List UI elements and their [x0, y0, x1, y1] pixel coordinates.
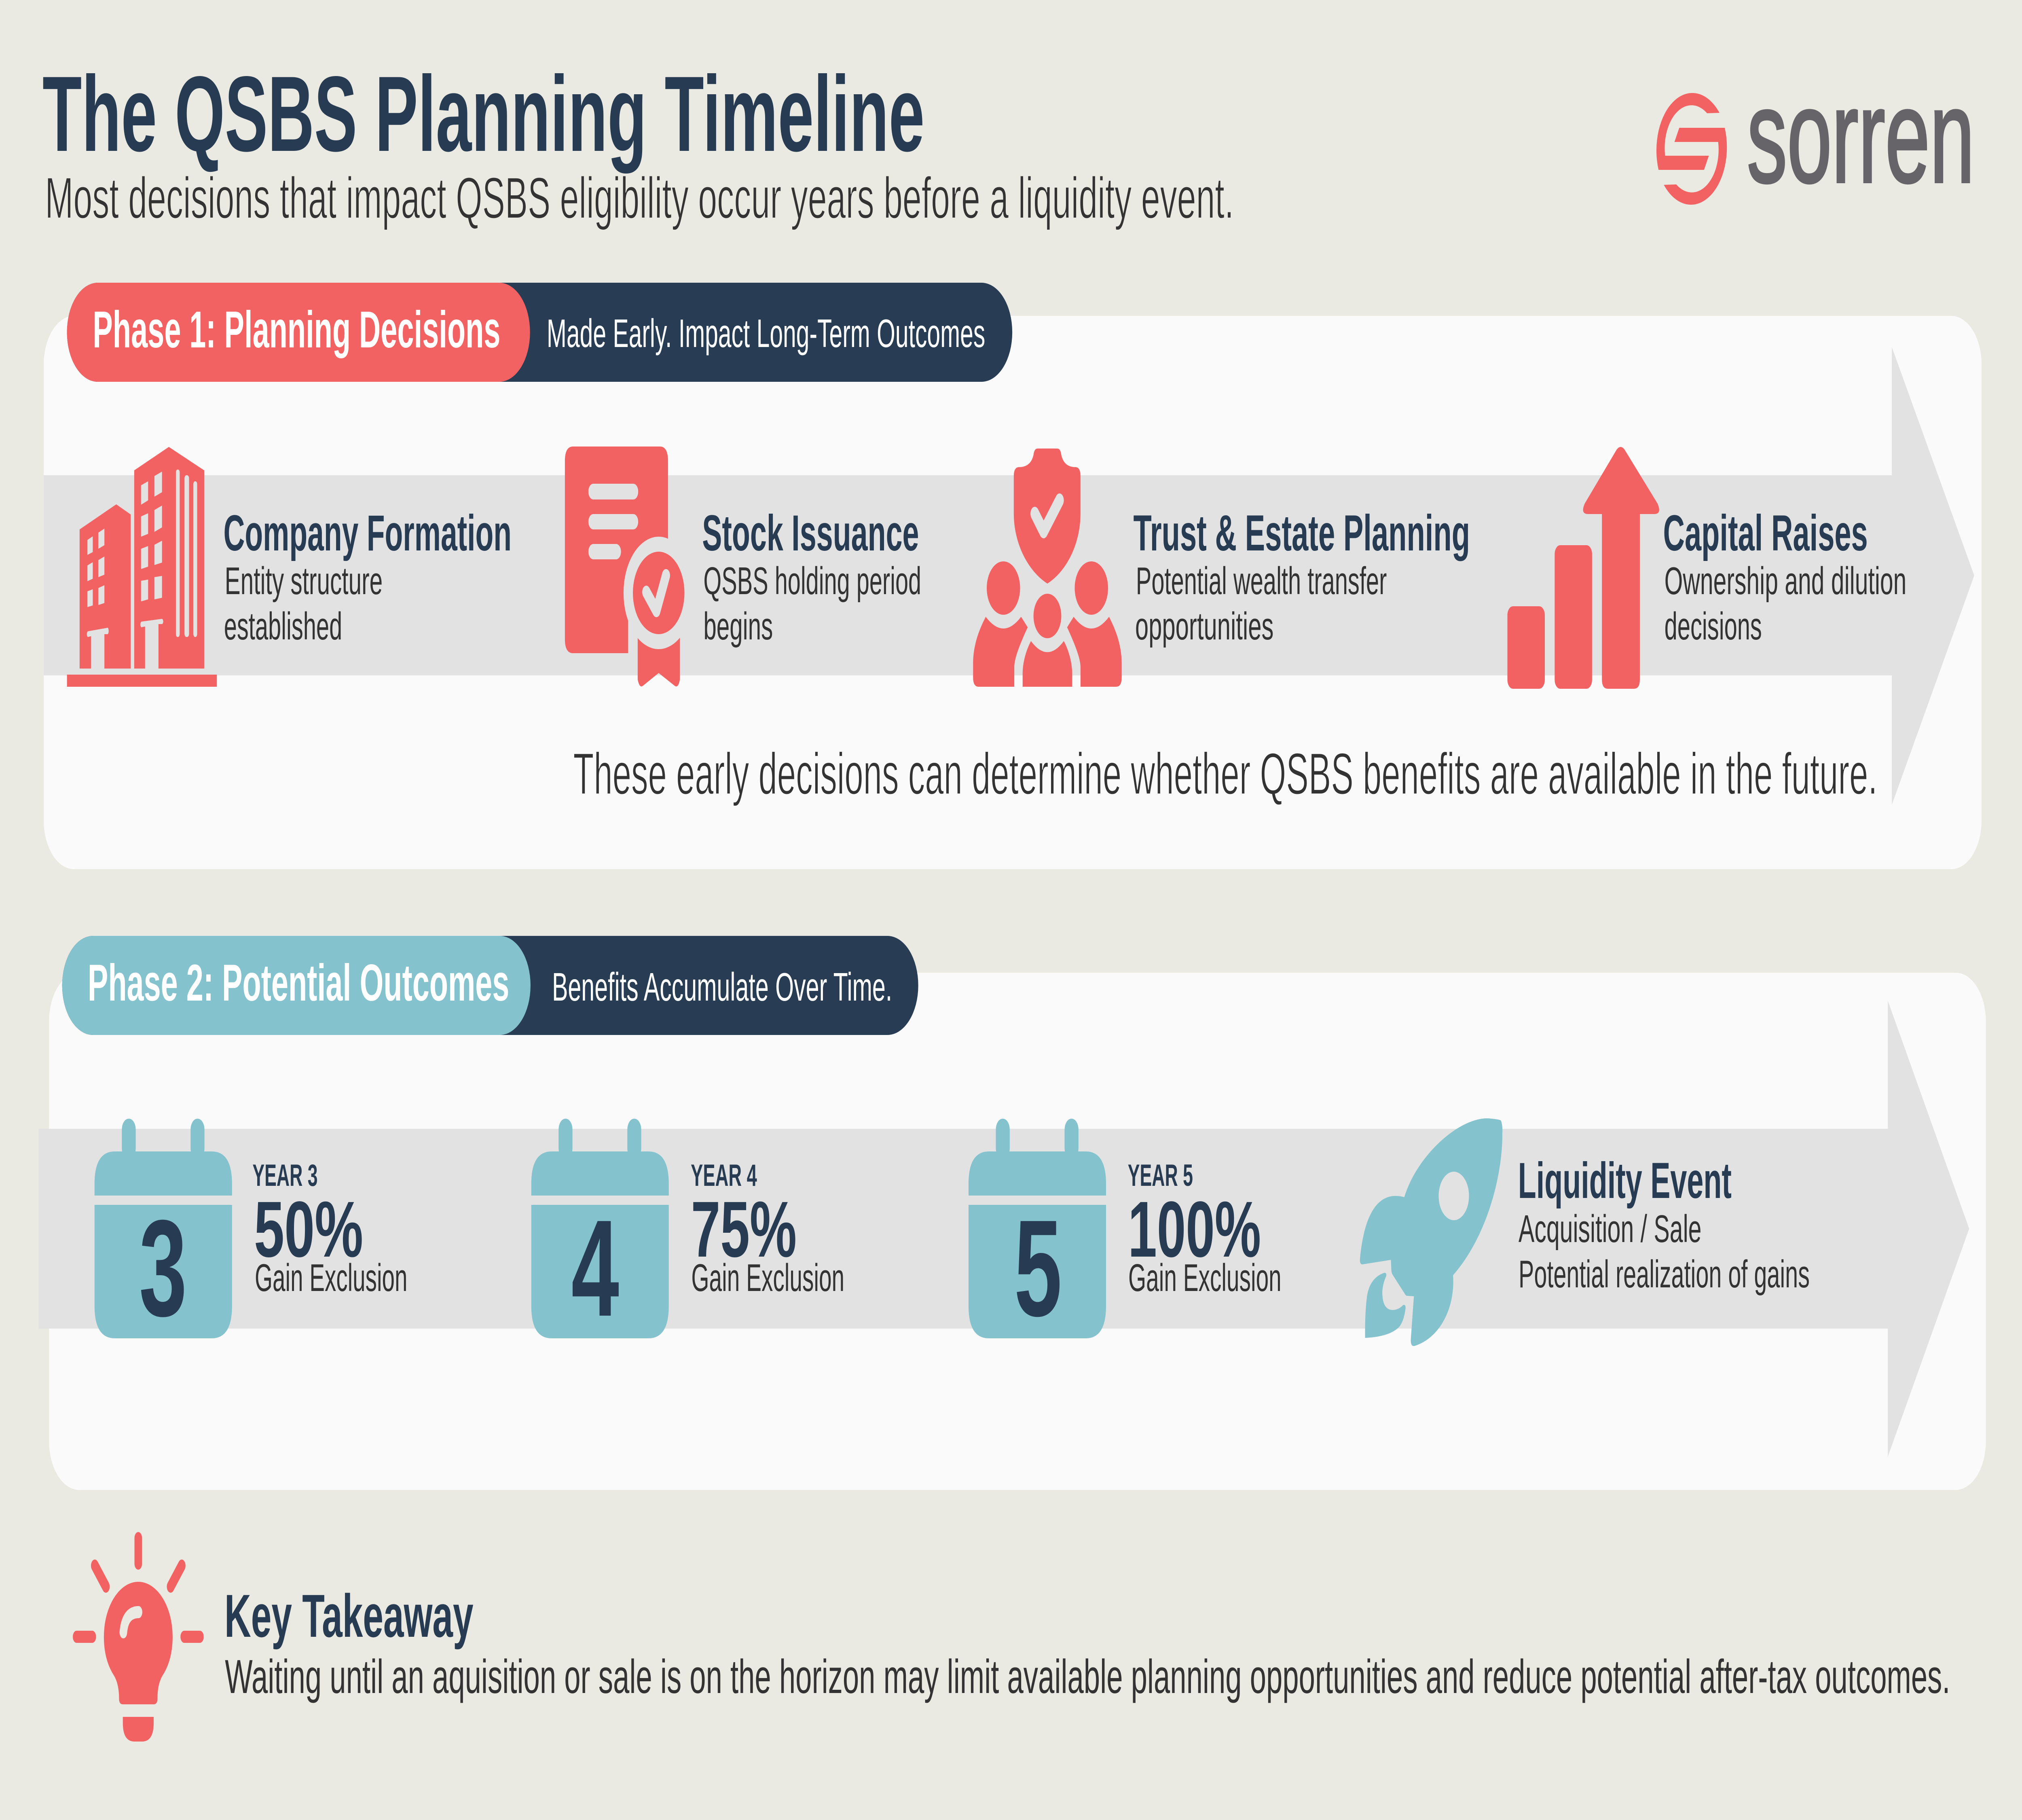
- icon: light bulb: [76, 1538, 200, 1742]
- text: year 3 exclusion: Gain Exclusion: [255, 1256, 407, 1299]
- text: liquidity event: Acquisition / Sale: [1519, 1207, 1702, 1250]
- text: year 3 exclusion: 50%: [254, 1185, 363, 1274]
- text: stock issuance: [702, 505, 921, 648]
- text: company formation: Company Formation: [223, 505, 512, 562]
- icon: sorren S mark: [1656, 93, 1727, 205]
- phase 2 pill heading: [62, 936, 918, 1035]
- key takeaway: Waiting until an aquisition or sale is on the horizon may limit available planning opportunities and reduce potential after-tax outcomes.: [225, 1650, 1950, 1703]
- text: company formation: Entity structure: [225, 559, 383, 602]
- text: stock issuance: QSBS holding period: [703, 559, 921, 602]
- text: capital raises: [1663, 505, 1906, 648]
- key takeaway: [224, 1582, 1950, 1703]
- text: capital raises: Ownership and dilution: [1665, 559, 1906, 602]
- panel: phase 1: [44, 283, 1982, 869]
- panel: phase 2: [39, 936, 1986, 1490]
- icon: calendar year 5: 5: [1014, 1191, 1062, 1345]
- icon: calendar year 4: [531, 1119, 669, 1345]
- text: capital raises: decisions: [1665, 605, 1762, 648]
- icon: calendar year 5: [969, 1119, 1106, 1345]
- logo wordmark: sorren: [1747, 62, 1975, 211]
- text: trust and estate planning: Trust & Estate Planning: [1133, 505, 1470, 562]
- icon: shield and family: [973, 449, 1122, 687]
- phase 2 pill heading: Phase 2: Potential Outcomes: [88, 954, 509, 1012]
- icon: calendar year 4: 4: [571, 1191, 620, 1345]
- title: The QSBS Planning Timeline: [42, 54, 924, 174]
- icon: certificate: [565, 447, 694, 686]
- phase 2 pill heading: Benefits Accumulate Over Time.: [552, 965, 892, 1009]
- text: capital raises: Capital Raises: [1663, 505, 1868, 562]
- text: company formation: [223, 505, 512, 648]
- text: liquidity event: Potential realization of gains: [1519, 1253, 1810, 1295]
- text: year 5 exclusion: YEAR 5: [1128, 1159, 1193, 1193]
- text: trust and estate planning: [1133, 505, 1470, 648]
- icon: rising bar chart: [1508, 447, 1659, 689]
- subtitle: Most decisions that impact QSBS eligibility occur years before a liquidity event.: [45, 165, 1234, 231]
- arrow: phase 1 timeline: [44, 347, 1974, 805]
- phase 1 pill heading: Made Early. Impact Long-Term Outcomes: [547, 311, 985, 356]
- icon: calendar year 3: 3: [139, 1191, 187, 1345]
- icon: rocket: [1360, 1118, 1502, 1346]
- text: stock issuance: begins: [703, 605, 773, 648]
- text: year 3 exclusion: YEAR 3: [252, 1159, 318, 1193]
- text: year 5 exclusion: Gain Exclusion: [1128, 1256, 1282, 1299]
- arrow: phase 2 timeline: [39, 1001, 1969, 1457]
- phase 1 pill heading: [67, 283, 1012, 382]
- phase 1 note: These early decisions can determine whether QSBS benefits are available in the future.: [573, 741, 1877, 806]
- text: year 3 exclusion: [252, 1159, 408, 1299]
- text: stock issuance: Stock Issuance: [702, 505, 919, 562]
- text: year 4 exclusion: Gain Exclusion: [691, 1256, 844, 1299]
- text: year 4 exclusion: [691, 1159, 844, 1299]
- icon: buildings: [67, 447, 217, 687]
- text: liquidity event: [1518, 1153, 1810, 1295]
- text: year 5 exclusion: [1128, 1159, 1282, 1299]
- text: liquidity event: Liquidity Event: [1518, 1153, 1732, 1209]
- text: year 4 exclusion: 75%: [691, 1185, 797, 1274]
- phase 1 pill heading: Phase 1: Planning Decisions: [93, 301, 501, 359]
- icon: calendar year 3: [95, 1119, 232, 1345]
- text: trust and estate planning: opportunities: [1135, 605, 1273, 648]
- text: year 4 exclusion: YEAR 4: [691, 1159, 757, 1193]
- text: year 5 exclusion: 100%: [1128, 1185, 1261, 1274]
- text: trust and estate planning: Potential wealth transfer: [1136, 559, 1387, 602]
- key takeaway: Key Takeaway: [224, 1582, 474, 1650]
- logo: sorren: [1656, 62, 1975, 211]
- text: company formation: established: [224, 605, 342, 648]
